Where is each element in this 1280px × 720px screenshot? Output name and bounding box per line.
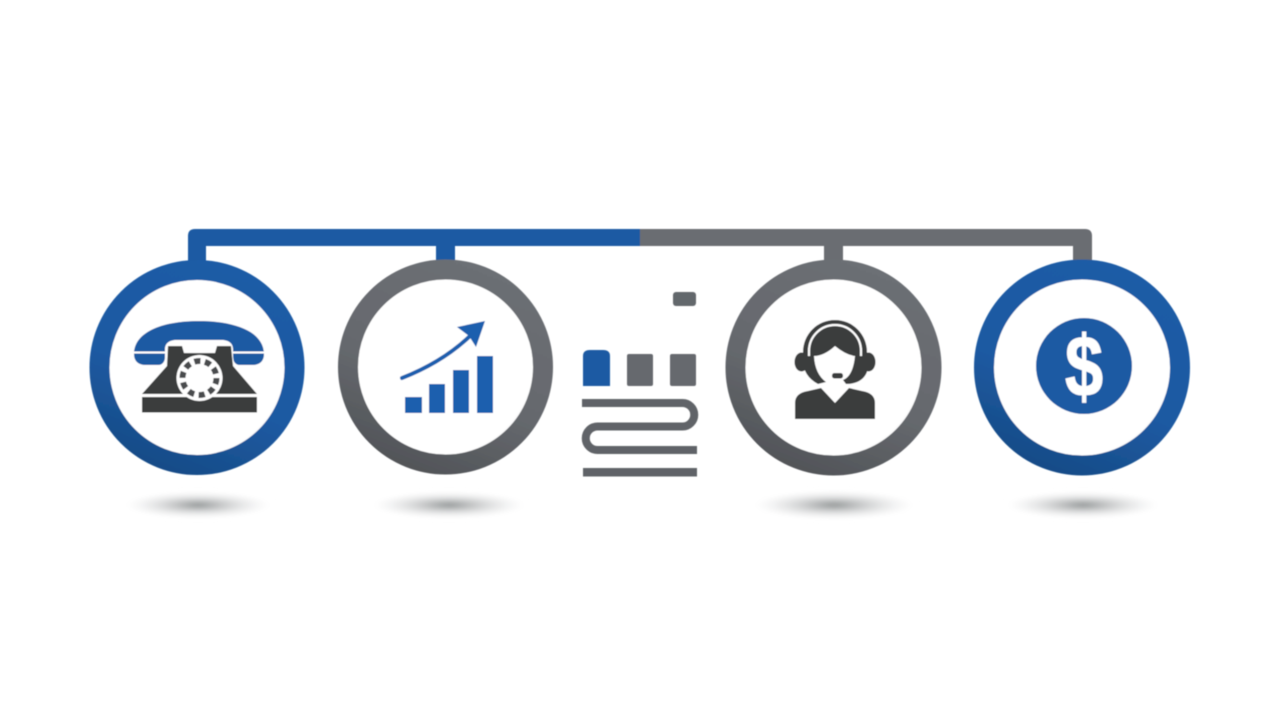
- infographic artwork: [100, 229, 1180, 520]
- icon: growth chart: [402, 321, 493, 413]
- bottom line: [583, 468, 697, 476]
- ring: support agent: [736, 270, 932, 466]
- panel: support agent circle: [736, 270, 932, 520]
- icon: dollar: [1036, 318, 1132, 415]
- small gray tab: [673, 292, 696, 306]
- panel: central bars and lines: [582, 292, 697, 476]
- ground shadow: growth chart: [367, 491, 531, 519]
- ring: dollar: [984, 270, 1180, 466]
- icon: dollar: $: [1065, 319, 1103, 415]
- panel: telephone circle: [100, 270, 294, 519]
- ring: telephone: [100, 270, 294, 465]
- gray bar left: [627, 354, 653, 386]
- ground shadow: support agent: [748, 490, 920, 520]
- icon: telephone: [132, 321, 266, 412]
- serpentine line: [582, 403, 697, 450]
- ground shadow: dollar: [1001, 491, 1165, 519]
- blue bar: [583, 350, 610, 386]
- connector bar: [188, 229, 1092, 264]
- gray bar right: [670, 354, 696, 386]
- ground shadow: telephone: [120, 491, 276, 519]
- ring: growth chart: [348, 270, 543, 464]
- panel: dollar circle: [984, 270, 1180, 519]
- panel: growth chart circle: [348, 270, 543, 519]
- icon: support agent: [794, 320, 876, 419]
